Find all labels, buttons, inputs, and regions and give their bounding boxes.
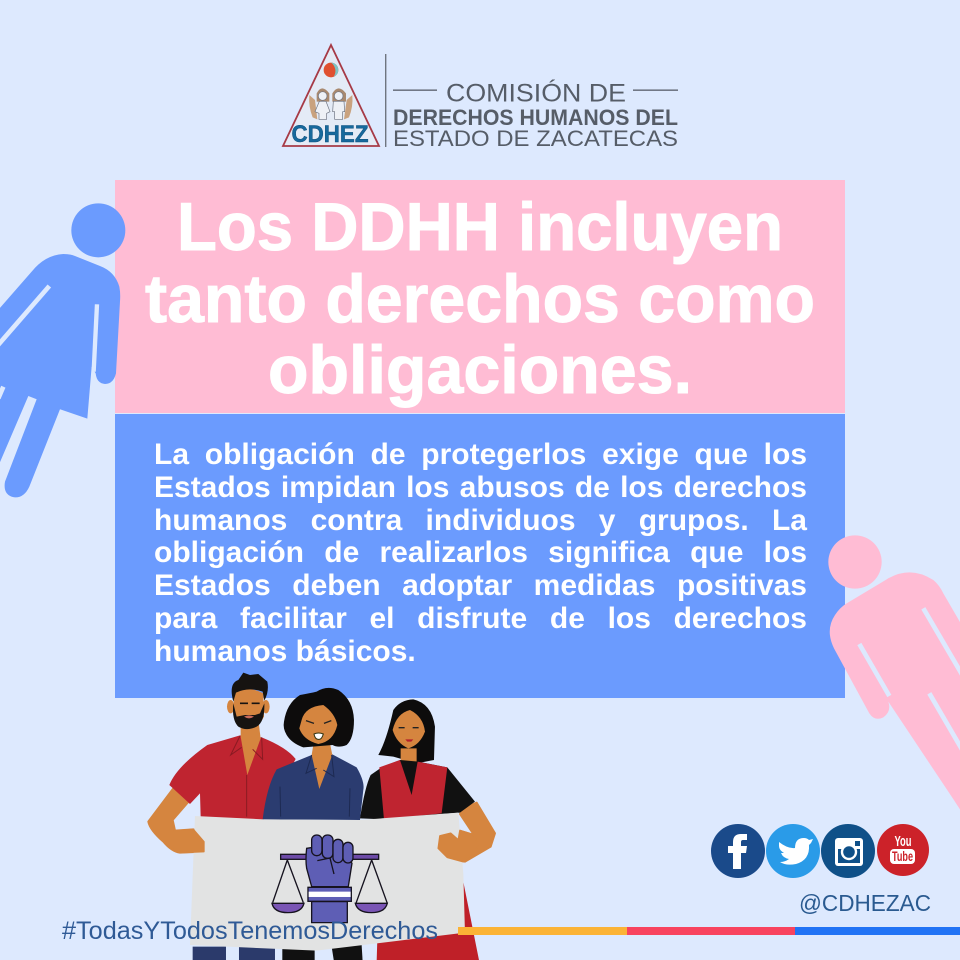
person: woman in blue shirt (263, 688, 364, 820)
icon: pink man figure (828, 535, 960, 840)
icon: facebook (711, 824, 765, 878)
illustration: three people holding a banner (148, 673, 495, 960)
logo text: Derechos Humanos del: DERECHOS HUMANOS DEL (393, 105, 678, 130)
body text block: La obligación de protegerlos exige que los (154, 438, 807, 471)
man's hand (167, 829, 204, 853)
icon: logo triangle (283, 45, 379, 148)
hand on banner (438, 831, 478, 862)
body text block: humanos básicos. (154, 635, 416, 668)
panel: blue body background (115, 414, 845, 698)
logo: CDHEZ (283, 45, 678, 151)
social icons (711, 824, 929, 878)
person: man in red shirt (148, 673, 296, 853)
icon: fist and scales of justice (272, 835, 387, 923)
heading: obligaciones. (268, 332, 692, 408)
logo text: Comisión de: COMISIÓN DE (446, 78, 626, 108)
person: woman in red vest (360, 699, 495, 862)
social handle: @CDHEZAC (799, 890, 931, 916)
body text block: obligación de realizarlos significa que los (154, 536, 807, 569)
skirt and legs (193, 873, 479, 960)
banner (190, 813, 465, 951)
icon: twitter (766, 824, 820, 878)
panel: pink heading background (115, 180, 845, 413)
body text block: Estados deben adoptar medidas positivas (154, 569, 807, 602)
tricolor bar (458, 927, 960, 935)
body text block: humanos contra individuos y grupos. La (154, 504, 807, 537)
icon: youtube: You (894, 833, 912, 850)
logo text: Estado de Zacatecas: ESTADO DE ZACATECAS (393, 126, 678, 151)
icon: youtube: Tube (892, 848, 913, 864)
body text block: Estados impidan los abusos de los derechos (154, 471, 807, 504)
body text block: para facilitar el disfrute de los derechos (154, 602, 807, 635)
heading (145, 189, 815, 408)
icon: instagram (821, 824, 875, 878)
body text block (154, 438, 808, 668)
icon: youtube (877, 824, 929, 876)
hashtag: #TodasYTodosTenemosDerechos (62, 917, 438, 945)
heading: tanto derechos como (145, 261, 815, 337)
icon: logo triangle: CDHEZ (292, 121, 369, 148)
icon: blue woman figure (0, 203, 125, 497)
heading: Los DDHH incluyen (177, 189, 783, 265)
